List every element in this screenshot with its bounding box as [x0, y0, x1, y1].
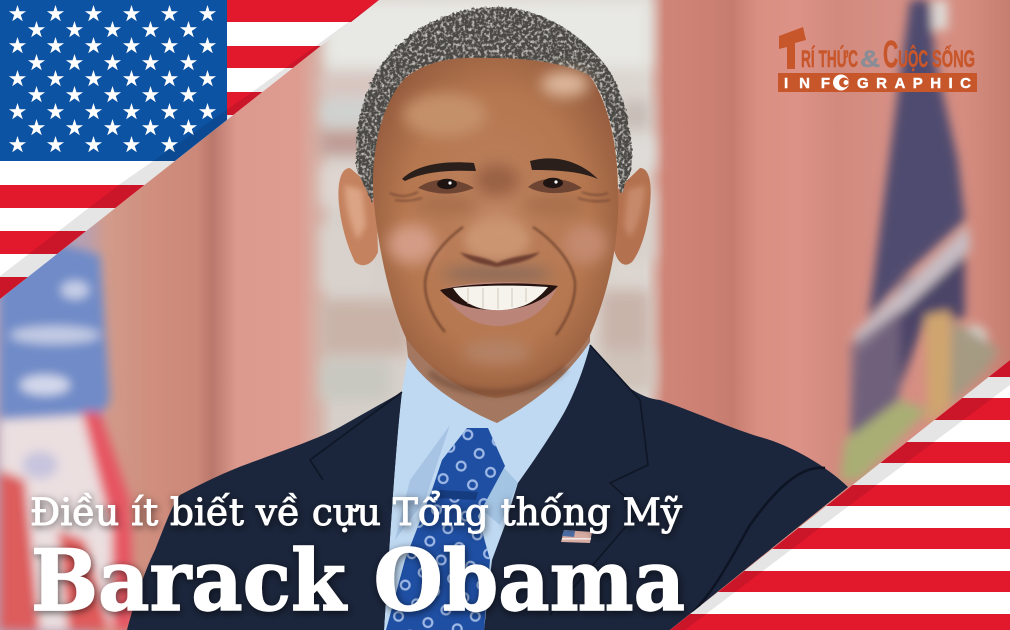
portrait of Barack Obama [127, 7, 848, 630]
logo wordmark: CUỘC [883, 34, 928, 76]
suit jacket [127, 345, 848, 630]
flag lapel pin [561, 530, 592, 543]
chin shadow [430, 368, 565, 392]
stripes [670, 360, 1010, 630]
logo infographic bar: INF [784, 75, 830, 92]
face [373, 58, 618, 398]
logo wordmark: & [860, 46, 880, 73]
main name: Barack Obama [31, 531, 685, 630]
subtitle: Điều ít biết về cựu Tổng thống Mỹ [30, 491, 682, 534]
logo wordmark: RÍ THỨC [801, 45, 858, 73]
shirt [384, 340, 590, 630]
logo infographic bar [778, 73, 977, 92]
lapels [484, 345, 648, 630]
logo infographic bar: GRAPHIC [857, 75, 971, 92]
hair [356, 7, 632, 205]
smile lines [425, 227, 575, 335]
blue canton with stars [0, 0, 227, 161]
title [30, 491, 685, 630]
face shading [388, 71, 607, 364]
logo wordmark [801, 34, 975, 76]
flag corner: bottom right [670, 360, 1010, 630]
logo T mark [779, 27, 806, 69]
flag corner: top left [0, 0, 380, 300]
blurred flag on the right [840, 0, 1000, 480]
logo: Tri Thuc & Cuoc Song Infographic [778, 27, 977, 92]
nose [460, 222, 540, 267]
blurred flag on the left [0, 240, 135, 630]
stripes [0, 0, 380, 300]
eyebrows [402, 158, 598, 181]
mouth and teeth [440, 282, 558, 326]
ears [338, 168, 651, 265]
tie [386, 428, 505, 630]
eyes [390, 178, 610, 201]
neck [405, 330, 590, 423]
logo wordmark: SỐNG [932, 45, 975, 73]
